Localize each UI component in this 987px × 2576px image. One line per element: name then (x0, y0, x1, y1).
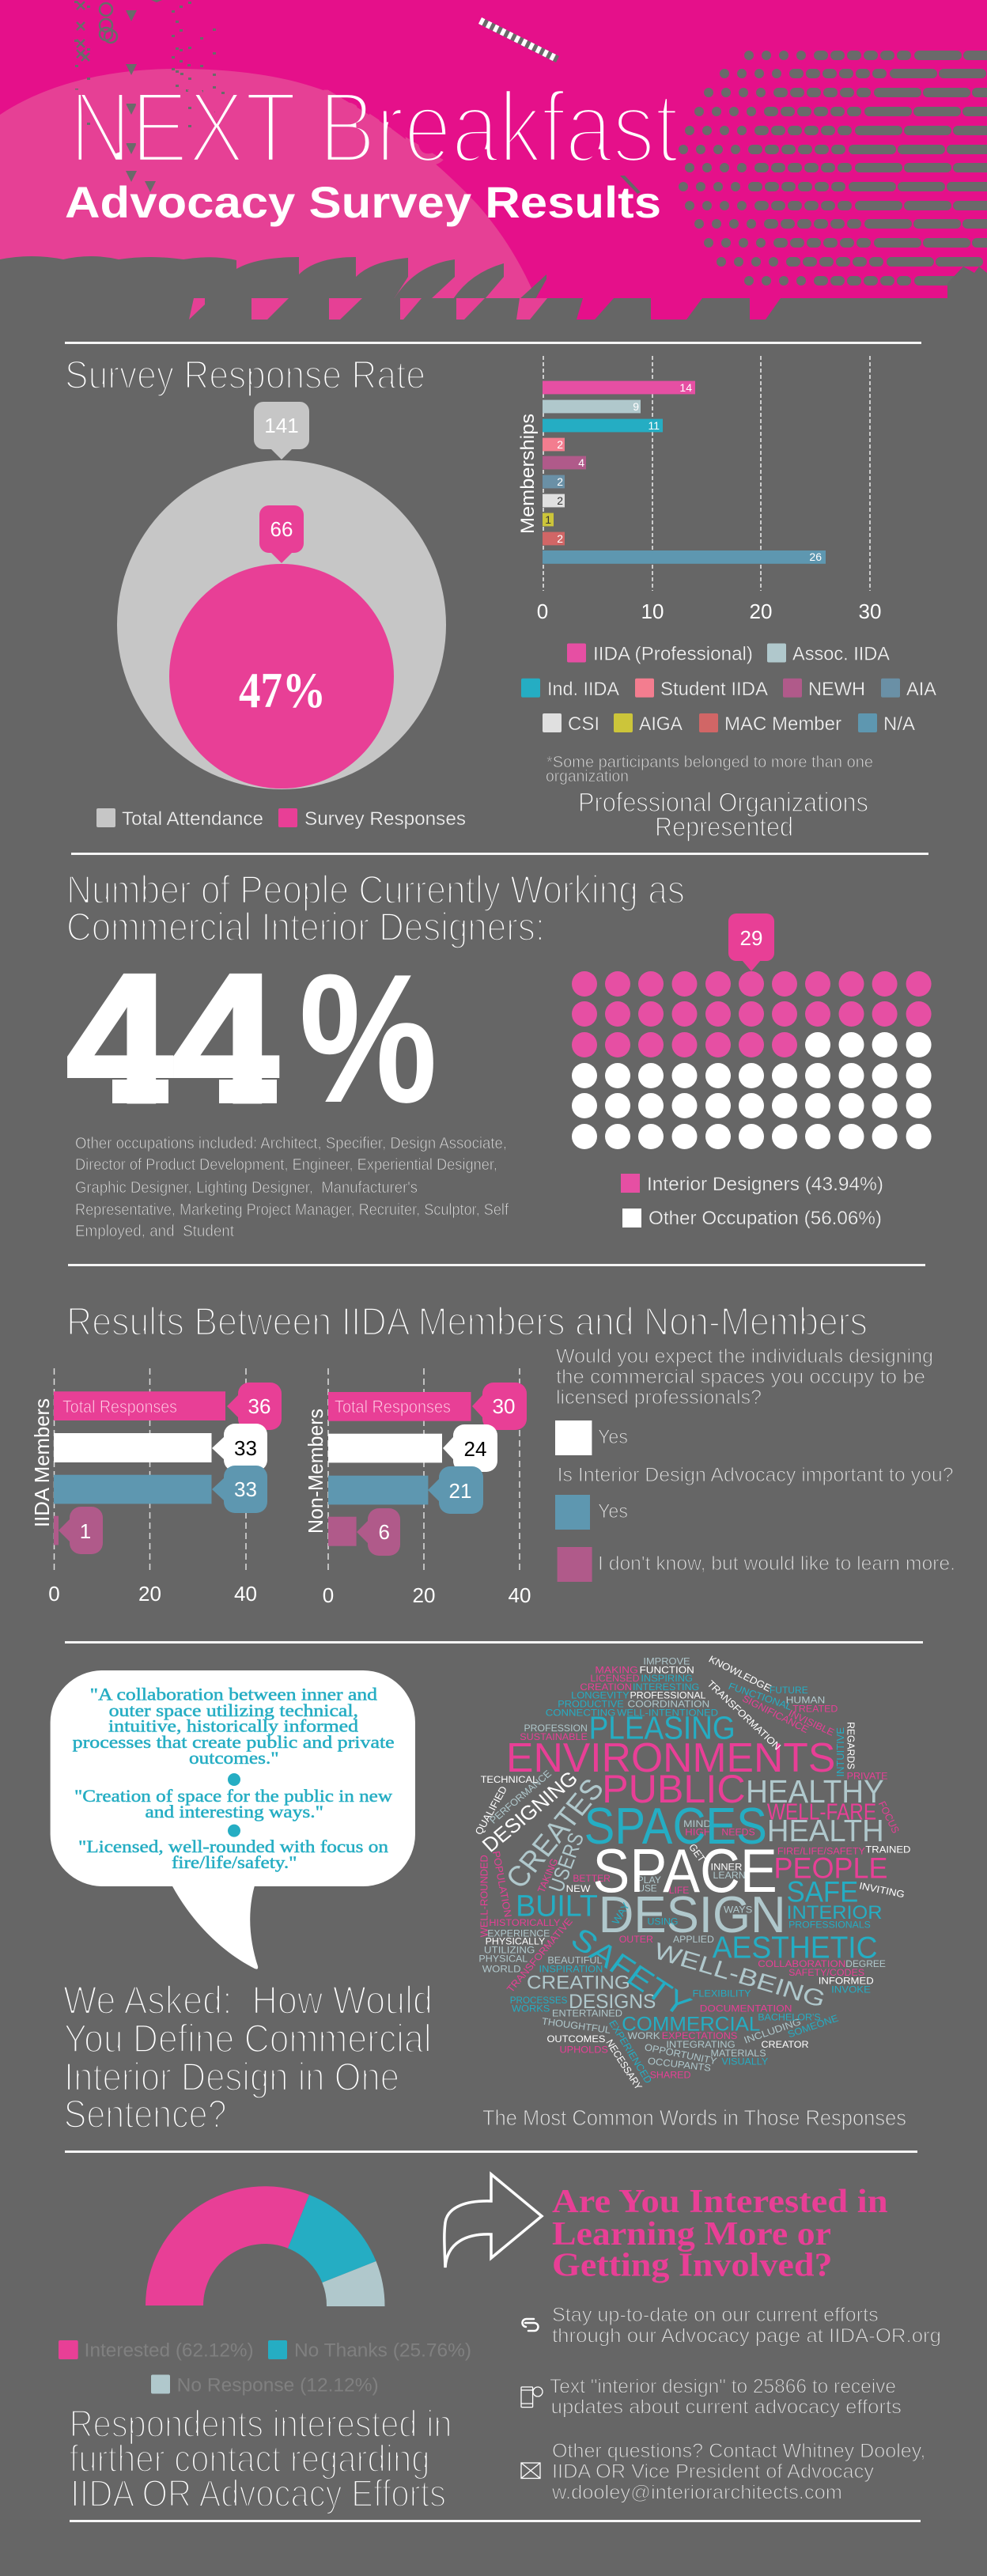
callout: 141: 141 (264, 414, 299, 437)
legend: No Thanks (25.76%) (294, 2340, 471, 2362)
word cloud: DESIGN (599, 1886, 786, 1944)
contact line: email: IIDA OR Vice President of Advocacy (552, 2461, 875, 2483)
word cloud: BACHELOR'S (758, 2012, 821, 2022)
word cloud: HEALTH (767, 1814, 884, 1848)
word cloud: WELL-ROUNDED (478, 1855, 490, 1937)
speech bubble: "Licensed, well-rounded with focus on (78, 1836, 388, 1856)
word cloud: WAYS (724, 1905, 752, 1916)
footnote: *Some participants belonged to more than one (546, 754, 873, 771)
bar chart: 2 (557, 532, 563, 545)
question legend: Yes (598, 1500, 628, 1523)
word cloud: WELL-INTENTIONED (617, 1708, 718, 1718)
bar chart: 2 (557, 475, 563, 488)
word cloud: FIRE/LIFE/SAFETY (777, 1846, 866, 1856)
word cloud: QUALIFIED (473, 1784, 509, 1836)
word cloud: SUSTAINABLE (520, 1731, 588, 1742)
word cloud: USING (648, 1916, 678, 1927)
word cloud: PROFESSION (524, 1723, 588, 1734)
legend: CSI (568, 713, 599, 735)
panel: members vs non-members (30, 1299, 955, 1607)
bar label: Total Responses (335, 1397, 451, 1417)
big number: % (299, 936, 437, 1141)
title: NEXT Breakfast (70, 71, 679, 184)
speech bubble: and interesting ways." (146, 1802, 323, 1821)
legend: AIA (906, 679, 936, 700)
word cloud: PLEASING (589, 1709, 736, 1746)
word cloud: USE (637, 1883, 657, 1894)
percentage: 47% (239, 662, 326, 718)
quote text: "A collaboration between inner and (90, 1685, 377, 1704)
word cloud: SPACE (592, 1836, 777, 1905)
value tags: 30 (493, 1394, 515, 1418)
bar chart: 4 (578, 456, 584, 469)
call to action heading: Learning More or (552, 2216, 831, 2253)
word cloud: OUTER (619, 1934, 653, 1945)
axis labels: 10 (641, 600, 664, 623)
header banner (0, 0, 987, 330)
axis title: Memberships (517, 414, 539, 534)
speech bubble: intuitive, historically informed (108, 1716, 358, 1736)
word cloud: INSPIRATION (539, 1964, 603, 1974)
heading: Sentence? (64, 2092, 227, 2136)
word cloud: PUBLIC (602, 1767, 746, 1811)
axis labels: 0 (537, 600, 548, 623)
word cloud: DEGREE (845, 1959, 886, 1969)
word cloud: WORK (627, 2030, 660, 2041)
word cloud: APPLIED (673, 1934, 714, 1945)
word cloud: PRIVATE (847, 1771, 887, 1781)
word cloud: LIFE (669, 1885, 689, 1896)
heading: IIDA OR Advocacy Efforts (70, 2473, 446, 2515)
word cloud: ENVIRONMENTS (506, 1734, 835, 1781)
axis labels: 30 (859, 600, 881, 623)
word cloud: WORKS (512, 2003, 550, 2014)
panel: further contact (59, 2174, 941, 2515)
word cloud: SHARED (650, 2070, 690, 2080)
legend: MAC Member (724, 713, 841, 735)
word cloud: INSPIRING (641, 1673, 693, 1684)
arrow (444, 2174, 542, 2268)
word cloud: UTILIZING (484, 1945, 535, 1956)
word cloud: IMPROVE (643, 1656, 690, 1666)
axis labels: 0 (323, 1583, 334, 1607)
word cloud: MAKING (595, 1665, 638, 1675)
word cloud: OUTCOMES (546, 2034, 605, 2045)
legend: Ind. IIDA (547, 679, 619, 700)
value tags (59, 1383, 282, 1554)
bar chart: 9 (633, 400, 639, 413)
word cloud: LONGEVITY (571, 1690, 630, 1701)
callout: 29: 29 (740, 926, 762, 950)
other occupations text: Director of Product Development, Engineer, Experiential Designer, (75, 1156, 497, 1174)
decorative scatter of marks (74, 0, 225, 192)
contact line: text message: Text "interior design" to 25866 to receive (550, 2376, 896, 2398)
word cloud: PROFESSIONAL (630, 1690, 705, 1701)
word cloud: INTERIOR (787, 1902, 883, 1923)
word cloud: WORLD (482, 1964, 521, 1974)
word cloud: EXPECTATIONS (662, 2030, 737, 2041)
word cloud: HEALTHY (746, 1773, 884, 1810)
heading: You Define Commercial (64, 2017, 432, 2061)
panel: define commercial interior design (51, 1654, 910, 2136)
decorative striped bar (480, 21, 558, 59)
word cloud: COORDINATION (627, 1699, 709, 1710)
word cloud: OPPORTUNITY (644, 2042, 718, 2067)
word cloud: PLAY (637, 1874, 661, 1886)
word cloud: TAKING (535, 1857, 561, 1894)
callout: 141 (254, 402, 309, 460)
word cloud: NECESSARY (603, 2037, 645, 2092)
word cloud: TECHNICAL (481, 1774, 538, 1785)
word cloud: LEARN (713, 1870, 746, 1881)
axis labels (48, 1582, 531, 1607)
word cloud: TRAINED (865, 1844, 910, 1855)
word cloud: MATERIALS (711, 2048, 766, 2059)
legend: NEWH (808, 679, 865, 700)
word cloud: CREATES (500, 1773, 611, 1894)
divider lines (65, 342, 928, 2522)
axis labels (537, 600, 881, 623)
decorative gray skyline (0, 176, 987, 330)
word cloud: INFORMED (819, 1976, 874, 1986)
word cloud: HIGH (685, 1827, 711, 1838)
word cloud: BUILT (516, 1890, 598, 1923)
word cloud: INVITING (858, 1881, 906, 1900)
word cloud: INTERESTING (633, 1681, 699, 1693)
bar chart (543, 356, 870, 591)
word cloud: DESIGNING (478, 1766, 582, 1857)
word cloud: INTEGRATING (666, 2039, 736, 2050)
word cloud: BEAUTIFUL (547, 1955, 603, 1966)
value tags: 36 (248, 1394, 270, 1418)
value tags (357, 1383, 527, 1556)
word cloud (473, 1654, 910, 2092)
legend (621, 1174, 883, 1229)
bar chart: 2 (557, 494, 563, 507)
word cloud: SPACES (584, 1798, 767, 1855)
word cloud: ENTERTAINED (552, 2008, 622, 2019)
question legend: I don't know, but would like to learn more. (598, 1553, 955, 1575)
other occupations text (75, 1135, 509, 1240)
question legend: licensed professionals? (556, 1386, 762, 1409)
word cloud: FUTURE (770, 1685, 808, 1696)
speech bubble: processes that create public and private (73, 1732, 395, 1752)
heading: Results Between IIDA Members and Non-Members (66, 1299, 868, 1344)
question legend: the commercial spaces you occupy to be (556, 1366, 925, 1388)
footnote (546, 754, 873, 785)
word cloud: THOUGHTFUL (541, 2016, 611, 2036)
speech bubble (51, 1670, 415, 1969)
word cloud: REGARDS (845, 1722, 857, 1769)
subtitle: Advocacy Survey Results (65, 177, 661, 227)
word cloud: INVOKE (831, 1984, 871, 1995)
word cloud: CONNECTING (546, 1708, 615, 1718)
legend: IIDA (Professional) (593, 644, 753, 664)
contact line: email (551, 2440, 925, 2503)
word cloud: CREATING (527, 1972, 630, 1993)
word cloud: DOCUMENTATION (700, 2003, 792, 2014)
legend: N/A (883, 713, 915, 735)
legend: AIGA (639, 713, 683, 735)
word cloud caption: The Most Common Words in Those Responses (482, 2105, 906, 2130)
legend (96, 808, 466, 830)
axis labels: 20 (413, 1583, 435, 1607)
panel: survey response rate (65, 353, 466, 830)
legend: Student IIDA (660, 679, 768, 700)
axis labels: 20 (750, 600, 772, 623)
footnote: organization (546, 768, 629, 785)
word cloud: SAFETY (565, 1922, 697, 2023)
other occupations text: Representative, Marketing Project Manager, Recruiter, Sculptor, Self (75, 1201, 509, 1219)
word cloud: FOCUS (876, 1799, 902, 1835)
word cloud: CREATOR (762, 2039, 809, 2050)
word cloud: CREATION (580, 1681, 632, 1693)
word cloud: COMMERCIAL (622, 2012, 760, 2035)
word cloud: GET (686, 1842, 708, 1864)
legend: Total Attendance (122, 808, 263, 830)
chart title: Represented (655, 812, 793, 842)
axis titles: IIDA Members (30, 1398, 54, 1527)
word cloud: OCCUPANTS (647, 2056, 712, 2074)
legend: Interior Designers (43.94%) (647, 1174, 883, 1195)
word cloud: PROFESSIONALS (788, 1920, 871, 1930)
nested circle chart (117, 460, 446, 789)
call to action heading: Getting Involved? (552, 2248, 832, 2284)
legend: Assoc. IIDA (792, 644, 890, 664)
other occupations text: Graphic Designer, Lighting Designer, Manufacturer's (75, 1179, 418, 1197)
icon: phone (521, 2387, 543, 2408)
word cloud: HISTORICALLY (489, 1917, 561, 1928)
axis titles (30, 1398, 327, 1534)
contact line: web: Stay up-to-date on our current efforts (552, 2304, 879, 2326)
callout: 66: 66 (270, 517, 293, 541)
heading: Commercial Interior Designers: (66, 905, 545, 949)
bar chart: 1 (545, 513, 551, 526)
other occupations text: Employed, and Student (75, 1223, 234, 1240)
dot matrix chart (572, 971, 932, 1149)
word cloud: SAFETY/CODES (788, 1968, 864, 1978)
contact line: text message: updates about current advocacy efforts (551, 2396, 902, 2419)
word cloud: NEEDS (721, 1827, 755, 1838)
speech bubble: outer space utilizing technical, (109, 1700, 358, 1720)
word cloud: SIGNIFICANCE (740, 1693, 811, 1735)
word cloud: EXPERIENCED (607, 2018, 654, 2086)
speech bubble: fire/life/safety." (172, 1852, 297, 1872)
word cloud: LICENSED (590, 1673, 640, 1684)
panel: professional organizations chart (517, 356, 936, 842)
word cloud: INNER (711, 1862, 742, 1872)
contact line: web (552, 2304, 941, 2347)
other occupations text: Other occupations included: Architect, Specifier, Design Associate, (75, 1135, 507, 1152)
word cloud: USERS (543, 1829, 588, 1895)
heading: Interior Design in One (64, 2055, 399, 2099)
speech bubble: "Creation of space for the public in new (74, 1786, 392, 1806)
word cloud: EXPERIENCE (487, 1928, 550, 1939)
bar label: Total Responses (62, 1397, 177, 1417)
heading: Survey Response Rate (65, 353, 425, 397)
bar chart: 26 (809, 550, 822, 563)
value tags: 33 (234, 1436, 257, 1460)
word cloud: SOMEONE (786, 2013, 840, 2040)
axis labels: 40 (509, 1583, 531, 1607)
word cloud: INVISIBLE (786, 1708, 836, 1738)
legend: Interested (62.12%) (85, 2340, 254, 2362)
heading: further contact regarding (70, 2438, 430, 2480)
value tags: 24 (464, 1437, 486, 1461)
icon: link (522, 2319, 539, 2331)
word cloud: TREATED (792, 1704, 838, 1714)
contact line: email: w.dooley@interiorarchitects.com (551, 2481, 842, 2503)
contact line: web: through our Advocacy page at IIDA-OR.org (552, 2324, 941, 2347)
bar chart: non-members (328, 1368, 527, 1574)
word cloud: WELL-BEING (651, 1939, 829, 2013)
semi-donut chart (146, 2186, 385, 2306)
callout: 66 (259, 505, 304, 563)
contact line: email: Other questions? Contact Whitney Dooley, (552, 2440, 925, 2462)
word cloud: PERFORMANCE (487, 1768, 554, 1826)
speech bubble: outcomes." (189, 1748, 279, 1768)
word cloud: INTUITIVE (835, 1727, 846, 1776)
heading (63, 1978, 433, 2136)
legend: Other Occupation (56.06%) (649, 1208, 882, 1229)
word cloud: DESIGNS (569, 1990, 656, 2013)
heading: Respondents interested in (70, 2404, 452, 2445)
bar chart: 2 (557, 438, 563, 451)
word cloud: UPHOLDS (559, 2045, 608, 2055)
word cloud: PEOPLE (774, 1853, 887, 1885)
legend (59, 2340, 471, 2396)
word cloud: COLLABORATION (758, 1959, 845, 1969)
word cloud: POPULATION (490, 1850, 513, 1918)
axis labels: 20 (138, 1582, 161, 1606)
word cloud: TRANSFORMATION (705, 1678, 783, 1752)
word cloud: PHYSICAL (478, 1954, 528, 1965)
question legend: Yes (598, 1426, 628, 1448)
heading (70, 2404, 452, 2515)
axis labels: 0 (48, 1582, 60, 1606)
panel: commercial interior designers (66, 868, 932, 1240)
word cloud: BETTER (573, 1873, 611, 1884)
halftone dot rows (683, 55, 987, 281)
word cloud: VISUALLY (721, 2056, 769, 2067)
word cloud: WAY (610, 1901, 633, 1927)
icon: envelope (521, 2463, 540, 2479)
word cloud: HUMAN (786, 1695, 825, 1705)
word cloud: FUNCTION (640, 1665, 694, 1675)
value tags: 1 (80, 1519, 91, 1543)
word cloud: TRANSFORMATIVE (505, 1916, 575, 1995)
word cloud: KNOWLEDGE (707, 1654, 773, 1694)
heading: We Asked: How Would (63, 1978, 433, 2022)
bar chart: IIDA members (54, 1368, 282, 1574)
value tags: 6 (378, 1520, 390, 1544)
word cloud: AESTHETIC (713, 1931, 878, 1965)
call to action heading (552, 2184, 888, 2284)
contact line: text message (550, 2376, 902, 2419)
heading (66, 868, 685, 949)
question legend (555, 1345, 955, 1582)
word cloud: FLEXIBILITY (693, 1988, 751, 1999)
value tags: 33 (234, 1477, 257, 1501)
word cloud: MIND (683, 1818, 711, 1829)
call to action heading: Are You Interested in (552, 2184, 888, 2220)
word cloud: WELL-FARE (767, 1799, 876, 1825)
axis labels: 40 (234, 1582, 257, 1606)
word cloud: FUNCTIONAL (727, 1681, 793, 1712)
legend: Survey Responses (304, 808, 466, 830)
axis titles: Non-Members (304, 1409, 327, 1534)
question legend: Would you expect the individuals designing (556, 1345, 933, 1367)
callout: 29 (728, 914, 774, 971)
legend (521, 644, 936, 735)
bar chart: 14 (679, 381, 692, 394)
word cloud: PRODUCTIVE (558, 1699, 624, 1710)
big number: 44 (66, 936, 278, 1141)
legend: No Response (12.12%) (177, 2374, 379, 2396)
chart title (578, 788, 868, 842)
chart title: Professional Organizations (578, 788, 868, 818)
word cloud: NEW (566, 1883, 590, 1894)
word cloud: INCLUDING (743, 2016, 803, 2046)
word cloud: PROCESSES (510, 1995, 567, 2006)
word cloud: PHYSICALLY (486, 1936, 546, 1947)
word cloud: SAFE (787, 1876, 858, 1908)
question legend: Is Interior Design Advocacy important to you? (558, 1464, 954, 1486)
value tags: 21 (449, 1479, 471, 1503)
big number (66, 936, 437, 1141)
heading: Number of People Currently Working as (66, 868, 685, 912)
bar chart: 11 (648, 419, 660, 432)
